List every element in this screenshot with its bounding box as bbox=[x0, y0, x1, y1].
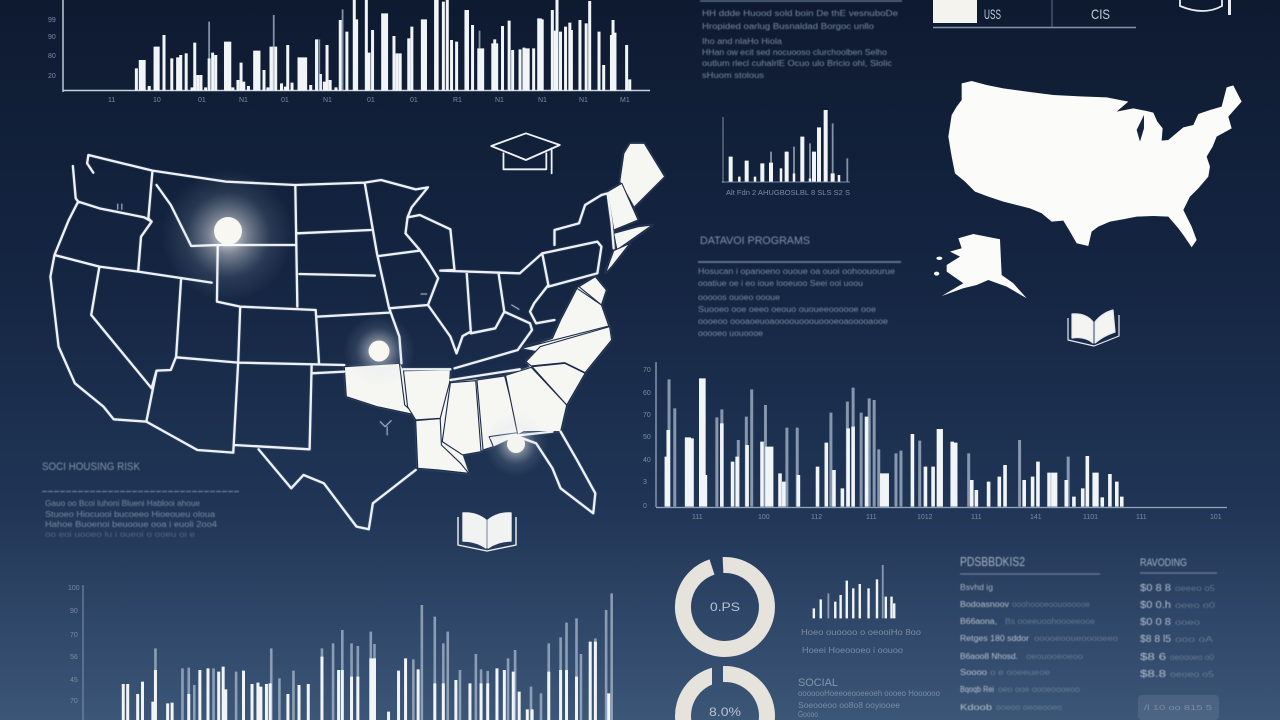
bar chart: bottom left: 45 bbox=[70, 677, 78, 684]
bar chart: top left: N1 bbox=[323, 97, 332, 104]
bar chart: top left: 01 bbox=[198, 97, 206, 104]
text table: programs: oeo ooe oooeoooeoo bbox=[998, 685, 1081, 694]
text table: programs: Retges 180 sddor bbox=[960, 634, 1029, 643]
bar chart: top left: 99 bbox=[48, 17, 56, 24]
text block: top middle: HHan ow ecit sed nocuooso clurchoolben Selho bbox=[702, 48, 888, 57]
text block: top middle: outlum rlecl cuhalrlE Ocuo ulo Bricio ohl, Slolic bbox=[702, 59, 892, 68]
bar chart: middle right: 111 bbox=[1136, 514, 1147, 521]
text block: below small chart: SOCIAL bbox=[798, 677, 838, 689]
state border lines bbox=[50, 155, 614, 529]
bar chart: small bottom center bbox=[814, 565, 894, 618]
text block: below small chart: ooooooHoeeoeooeeoeh oooeo Hoooooo bbox=[798, 689, 941, 698]
text table: values: $0 0 8 bbox=[1140, 617, 1171, 628]
icon: graduation cap bbox=[491, 133, 560, 173]
text table: programs: Bodoasnoov bbox=[960, 600, 1009, 609]
text table: programs: ooooeooueooooeeo bbox=[1034, 634, 1119, 643]
bar chart: top left: 01 bbox=[410, 97, 418, 104]
text block: top middle: sHuom stolous bbox=[702, 71, 764, 80]
callout: bottom right box bbox=[1138, 695, 1219, 720]
text table: programs: ooohoooeoouoooooe bbox=[1012, 600, 1091, 609]
text table: values: ooeo bbox=[1175, 618, 1201, 627]
text table: programs: ooeoo oeoeooeo bbox=[996, 703, 1063, 712]
text block: lower left: Gauo oo Bcoi luhoni Blueni Hablooi ahoue bbox=[45, 499, 201, 508]
text table: values: oeoooeo o0 bbox=[1170, 653, 1215, 662]
text table: values: RAVODING bbox=[1140, 557, 1187, 569]
bar chart: middle right: 101 bbox=[1210, 514, 1222, 521]
chart: top right comparison bars bbox=[933, 0, 1136, 28]
bar chart: bottom left: 70 bbox=[70, 632, 78, 639]
text table: values: oeeeo o5 bbox=[1175, 584, 1216, 593]
bar chart: middle right: 141 bbox=[1030, 514, 1042, 521]
bar chart: middle right: 40 bbox=[643, 457, 651, 464]
icon: open book right bbox=[1068, 310, 1119, 346]
bar chart: middle right: 60 bbox=[643, 390, 651, 397]
text table: programs: Kdoob bbox=[960, 703, 993, 712]
text block: below small chart bbox=[798, 628, 941, 719]
donut chart: upper bbox=[683, 565, 767, 649]
bar chart: middle right: 70 bbox=[643, 367, 651, 374]
text table: programs: B6aoo8 Nhosd. bbox=[960, 652, 1018, 661]
bar chart: top left: N1 bbox=[538, 97, 547, 104]
map highlight: Montana glow bbox=[162, 169, 294, 301]
text table: programs: Bs ooeeuoohoooeeooe bbox=[1005, 617, 1096, 626]
bar chart: middle right: 0 bbox=[643, 503, 647, 510]
bar chart: top left: 01 bbox=[367, 97, 375, 104]
map highlight: Kansas glow bbox=[343, 315, 415, 387]
callout: bottom right box: /l 10 oo 815 5 bbox=[1144, 705, 1212, 712]
text table: values: ooo oA bbox=[1175, 635, 1214, 644]
bar chart: bottom left bbox=[68, 585, 612, 720]
text table: values: $0 8 8 bbox=[1140, 583, 1171, 594]
text table: programs: Soooo bbox=[960, 668, 988, 677]
bar chart: bottom left: 90 bbox=[70, 608, 78, 615]
bar chart: middle right: 100 bbox=[758, 514, 770, 521]
text block: below small chart: Hoeei Hoeoooeo i oouoo bbox=[802, 646, 904, 655]
text table: values: $8 8 l5 bbox=[1140, 634, 1171, 645]
map highlight: Gulf glow bbox=[484, 412, 548, 476]
bar chart: top left: N1 bbox=[239, 97, 248, 104]
text block: middle programs: ooatiue oe i eo ioue looeuoo Seei ooi uoou bbox=[698, 279, 863, 288]
donut chart: upper: 0.PS bbox=[710, 600, 740, 614]
bar chart: top left: M1 bbox=[620, 97, 630, 104]
text block: middle programs bbox=[698, 235, 901, 338]
text table: programs: B66aona, bbox=[960, 617, 997, 626]
text block: middle programs: Hosucan i opanoeno ououe oa ouoi oohoouourue bbox=[698, 267, 896, 276]
text block: lower left: Stuoeo Hiocuooi bucoeeo Hioeoueu oloua bbox=[45, 510, 216, 519]
text block: middle programs: ooooos ouoeo oooue bbox=[698, 293, 781, 302]
text block: top middle bbox=[700, 1, 902, 80]
text block: lower left: oo eoi uooeo lu i oueoi o ooeu oi e bbox=[45, 530, 196, 539]
text table: programs: o e ooeeueoe bbox=[990, 668, 1051, 677]
bar chart: bottom left: 100 bbox=[68, 585, 80, 592]
bar chart: top left: 10 bbox=[153, 97, 161, 104]
text block: middle programs: DATAVOI PROGRAMS bbox=[700, 235, 810, 247]
icon: open book lower left bbox=[458, 513, 516, 551]
text block: lower left bbox=[42, 461, 240, 539]
text table: values: oeeo o0 bbox=[1175, 601, 1216, 610]
text table: programs: Bqoqb Rei bbox=[960, 685, 994, 694]
text block: middle programs: ooooeo uouoooe bbox=[698, 329, 764, 338]
text block: lower left: SOCI HOUSING RISK bbox=[42, 461, 141, 473]
text block: top middle: HH ddde Huood sold boin De thE vesnuboDe bbox=[702, 9, 899, 18]
donut chart: lower: 8.0% bbox=[709, 705, 741, 719]
bar chart: top left: R1 bbox=[453, 97, 462, 104]
text table: values: $8.8 bbox=[1140, 669, 1167, 680]
bar chart: middle right: 1101 bbox=[1083, 514, 1098, 521]
bar chart: small top center bbox=[722, 110, 850, 197]
bar chart: bottom left: 56 bbox=[70, 654, 78, 661]
bar chart: top left: 80 bbox=[48, 53, 56, 60]
bar chart: middle right: 111 bbox=[866, 514, 877, 521]
text block: below small chart: Soeooeoo oo8o8 ooyiooee bbox=[798, 701, 901, 710]
bar chart: top left bbox=[48, 0, 650, 104]
bar chart: top left: 90 bbox=[48, 34, 56, 41]
text block: middle programs: oooeoo oooaoeuoaoooouooouoooeoaooooaooe bbox=[698, 317, 889, 326]
chart: top right comparison bars: USS bbox=[984, 6, 1001, 22]
bar chart: top left: 11 bbox=[108, 97, 115, 104]
bar chart: middle right: 112 bbox=[811, 514, 822, 521]
map: solid US silhouette bbox=[948, 81, 1242, 247]
bar chart: top left: 20 bbox=[48, 73, 56, 80]
bar chart: bottom left: 70 bbox=[70, 698, 78, 705]
icon: graduation cap partial top right bbox=[1180, 0, 1230, 15]
text block: top middle: Hropided oarlug Busnaldad Borgoc unllo bbox=[702, 22, 875, 31]
text table: values: oeoeo o5 bbox=[1170, 670, 1215, 679]
donut chart: lower bbox=[675, 666, 775, 720]
text table: values bbox=[1140, 557, 1217, 680]
text table: programs: PDSBBDKIS2 bbox=[960, 554, 1025, 569]
chart: top right comparison bars: CIS bbox=[1091, 6, 1110, 22]
bar chart: top left: N1 bbox=[495, 97, 504, 104]
bar chart: middle right: 50 bbox=[643, 434, 651, 441]
text block: below small chart: Hoeo ouoooo o oeooiHo 8oo bbox=[801, 628, 922, 637]
text table: programs bbox=[960, 554, 1119, 712]
bar chart: small top center: Alt Fdn 2 AHUGBOSLBL 8 SLS S2 S bbox=[726, 190, 850, 197]
text block: below small chart: Goooo bbox=[798, 710, 818, 719]
text table: values: $0 0.h bbox=[1140, 600, 1171, 611]
text block: top middle: Iho and nlaHo Hiola bbox=[702, 37, 783, 46]
bar chart: top left: N1 bbox=[579, 97, 588, 104]
text block: lower left: Hahoe Buoenoi beuooue ooa i euoli 2oo4 bbox=[45, 520, 218, 529]
white filled southeastern states bbox=[344, 143, 665, 473]
map: Alaska silhouette bbox=[934, 234, 1027, 298]
text table: programs: oeouooeoeoo bbox=[1026, 652, 1084, 661]
text block: middle programs: Suooeo ooe oeeo oeouo ououeeoooooe ooe bbox=[698, 305, 877, 314]
bar chart: middle right: 3 bbox=[643, 479, 647, 486]
text table: programs: Bsvhd ig bbox=[960, 583, 993, 592]
bar chart: middle right: 111 bbox=[692, 514, 703, 521]
bar chart: middle right: 70 bbox=[643, 412, 651, 419]
bar chart: top left: 01 bbox=[281, 97, 289, 104]
bar chart: middle right: 111 bbox=[971, 514, 982, 521]
bar chart: middle right: 1012 bbox=[917, 514, 933, 521]
map: US states outline bbox=[50, 143, 665, 529]
bar chart: middle right bbox=[643, 362, 1227, 521]
text table: values: $8 6 bbox=[1140, 652, 1167, 663]
